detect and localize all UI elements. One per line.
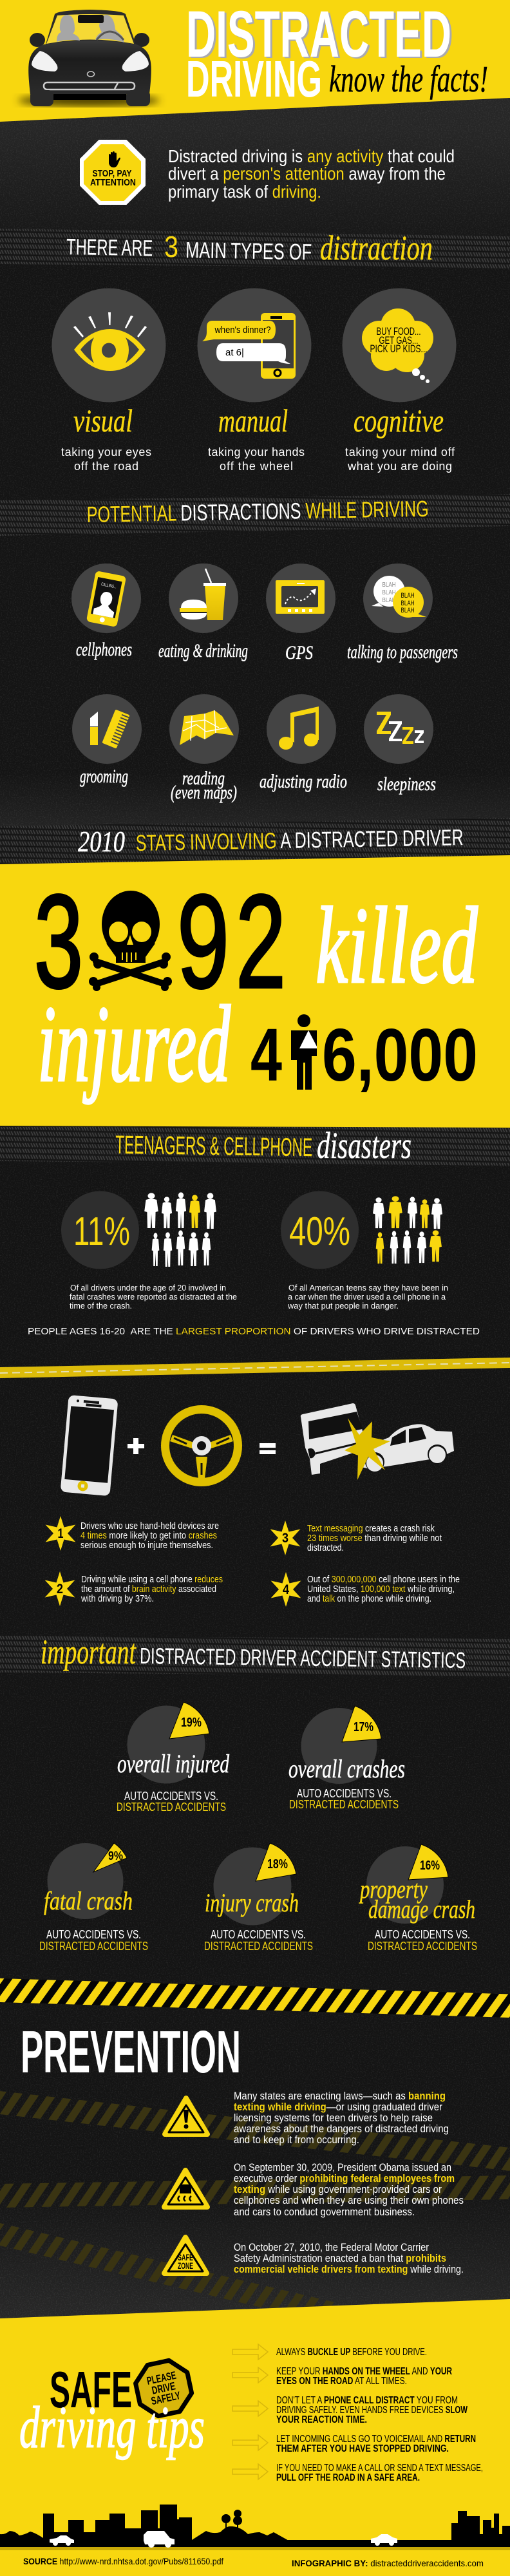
pie: overall crashes bbox=[288, 1706, 405, 1811]
caption: a car when the driver used a cell phone in a bbox=[288, 1293, 446, 1302]
heading: three main types: 3 bbox=[164, 230, 178, 263]
item: sleepiness bbox=[364, 694, 436, 795]
text bbox=[234, 2241, 464, 2275]
heading: important accident statistics: important bbox=[41, 1633, 137, 1671]
caption bbox=[287, 1283, 448, 1311]
facts list bbox=[45, 1516, 460, 1607]
stat: 11% bbox=[73, 1209, 130, 1254]
panel: visual bbox=[52, 289, 166, 473]
yellow background bbox=[0, 2299, 510, 2576]
tips list: DRIVING SAFELY. EVEN HANDS FREE DEVICES SLOW bbox=[276, 2405, 468, 2416]
pie: property damage crash bbox=[359, 1844, 477, 1953]
icon: people group bbox=[373, 1196, 442, 1264]
intro text: divert a person's attention away from the bbox=[168, 164, 446, 184]
pie: overall injured: overall injured bbox=[117, 1749, 230, 1778]
item: reading bbox=[169, 694, 239, 803]
pie: overall crashes: overall crashes bbox=[288, 1754, 405, 1783]
description: taking your mind off bbox=[345, 446, 455, 459]
fact 2 bbox=[45, 1571, 223, 1606]
item: sleepiness: sleepiness bbox=[377, 773, 436, 795]
tips list: DON'T LET A PHONE CALL DISTRACT YOU FROM bbox=[276, 2395, 458, 2406]
fact 4: Out of 300,000,000 cell phone users in the bbox=[307, 1575, 460, 1585]
panel: potential distractions grid bbox=[71, 564, 458, 803]
item: eating and drinking: eating & drinking bbox=[158, 640, 248, 661]
item: talking to passengers: BLAH bbox=[401, 592, 415, 600]
item: reading: reading bbox=[182, 768, 225, 789]
label: visual bbox=[73, 402, 133, 439]
icon: steering wheel bbox=[165, 1409, 238, 1482]
icon: thought cloud: PICK UP KIDS... bbox=[370, 343, 428, 355]
item: talking to passengers bbox=[347, 564, 458, 663]
fact 3 bbox=[270, 1520, 442, 1555]
circle bbox=[61, 1191, 139, 1269]
heading: 2010 stats bbox=[78, 825, 464, 858]
fact 4: and talk on the phone while driving. bbox=[307, 1594, 431, 1604]
circle bbox=[281, 1191, 359, 1269]
pie: property damage crash: AUTO ACCIDENTS VS. bbox=[375, 1928, 470, 1941]
pie: fatal crash: 9% bbox=[108, 1850, 123, 1863]
item: cellphones bbox=[71, 564, 141, 660]
fact 1: 1 bbox=[58, 1526, 64, 1541]
icon: people group bbox=[144, 1192, 216, 1267]
stat: 3092 killed: 2 bbox=[236, 867, 286, 1016]
stat: 416,000 injured: 4 bbox=[250, 1013, 282, 1097]
divider: yellow road line bbox=[0, 1358, 510, 1378]
icon: please drive safely sign: DRIVE bbox=[151, 2380, 176, 2397]
heading: safe: SAFE bbox=[50, 2361, 132, 2418]
icon: stop pay attention sign bbox=[80, 140, 145, 204]
pie: property damage crash: property bbox=[359, 1875, 428, 1904]
pie: injury crash: injury crash bbox=[205, 1888, 299, 1917]
caption: Of all American teens say they have been in bbox=[288, 1283, 448, 1293]
divider: hazard stripe tape bbox=[0, 1978, 510, 2018]
caption: time of the crash. bbox=[70, 1302, 132, 1311]
panel: cognitive bbox=[343, 289, 456, 473]
panel: safe driving tips bbox=[0, 2299, 510, 2576]
header panel bbox=[0, 0, 510, 122]
equals sign bbox=[260, 1443, 276, 1454]
pie: property damage crash: damage crash bbox=[368, 1895, 475, 1924]
panel: 2010 stats yellow bbox=[0, 855, 510, 1128]
tips list: ALWAYS BUCKLE UP BEFORE YOU DRIVE. bbox=[276, 2347, 427, 2358]
fact 2: with driving by 37%. bbox=[80, 1594, 154, 1604]
tips list: PULL OFF THE ROAD IN A SAFE AREA. bbox=[276, 2472, 420, 2483]
fact 3: 23 times worse than driving while not bbox=[307, 1533, 442, 1544]
item: grooming bbox=[72, 694, 142, 787]
intro text: Distracted driving is any activity that could bbox=[168, 146, 455, 166]
text bbox=[234, 2090, 449, 2146]
icon: phone bbox=[61, 1395, 118, 1496]
pie: overall crashes: AUTO ACCIDENTS VS. bbox=[297, 1787, 392, 1800]
description: off the road bbox=[74, 460, 138, 473]
text: and to keep it from occurring. bbox=[234, 2134, 359, 2146]
pie: property damage crash: DISTRACTED ACCIDENTS bbox=[368, 1940, 477, 1953]
prevention item 2 bbox=[164, 2161, 464, 2218]
icon: safe zone sign: SAFE bbox=[178, 2252, 193, 2262]
text: texting while driving—or using graduated driver bbox=[234, 2101, 442, 2113]
panel: manual bbox=[197, 289, 312, 473]
item: talking to passengers: BLAH bbox=[401, 607, 415, 614]
icon: please drive safely sign: SAFELY bbox=[150, 2389, 182, 2407]
icon: slippery road sign bbox=[164, 2170, 207, 2207]
icon: phone with text bubbles: at 6| bbox=[225, 347, 244, 358]
pie: injury crash: 18% bbox=[267, 1857, 288, 1871]
heading: prevention: PREVENTION bbox=[21, 2018, 241, 2085]
cars bbox=[50, 2531, 397, 2548]
tips list: EYES ON THE ROAD AT ALL TIMES. bbox=[276, 2376, 407, 2387]
description: taking your eyes bbox=[61, 446, 151, 459]
pie: fatal crash bbox=[39, 1843, 148, 1953]
fact 3: distracted. bbox=[307, 1543, 344, 1553]
fact 1 bbox=[46, 1516, 219, 1551]
text: licensing systems for teen drivers to help raise bbox=[234, 2112, 433, 2124]
stat: 40% bbox=[289, 1209, 350, 1254]
text: and cars to conduct government business. bbox=[234, 2206, 415, 2218]
item: gps bbox=[266, 564, 335, 663]
fact 3: 3 bbox=[282, 1531, 288, 1546]
pie: property damage crash: 16% bbox=[420, 1859, 440, 1873]
heading: potential distractions: POTENTIAL DISTRACTIONS WHILE DRIVING bbox=[86, 497, 429, 527]
item: talking to passengers: BLAH bbox=[382, 589, 395, 596]
fact 4 bbox=[271, 1572, 460, 1607]
circle bbox=[52, 289, 166, 402]
prevention item 1 bbox=[165, 2090, 449, 2146]
fact 1: serious enough to injure themselves. bbox=[80, 1540, 213, 1551]
icon: safe zone sign: ZONE bbox=[178, 2260, 193, 2271]
text: On September 30, 2009, President Obama issued an bbox=[234, 2161, 451, 2174]
intro text: primary task of driving. bbox=[168, 182, 321, 202]
text: texting while using government-provided cars or bbox=[234, 2183, 442, 2195]
fact 4: United States, 100,000 text while driving, bbox=[307, 1584, 455, 1595]
item: gps: GPS bbox=[285, 642, 313, 663]
icon: stop pay attention sign: ATTENTION bbox=[90, 177, 136, 188]
pie: overall injured: 19% bbox=[181, 1716, 202, 1730]
equation: phone plus wheel equals crash bbox=[61, 1395, 454, 1496]
fact 3: Text messaging creates a crash risk bbox=[307, 1524, 435, 1534]
icon: eye bbox=[73, 312, 147, 371]
pie: overall injured bbox=[117, 1702, 230, 1814]
icon: stop pay attention sign: STOP, PAY bbox=[93, 168, 131, 179]
tips list: YOUR REACTION TIME. bbox=[276, 2414, 367, 2425]
item: talking to passengers: BLAH bbox=[382, 582, 395, 589]
icon: phone with text bubbles: when's dinner? bbox=[214, 325, 270, 336]
panel: 11 percent bbox=[61, 1191, 237, 1311]
fact 2: the amount of brain activity associated bbox=[81, 1584, 216, 1595]
item: adjusting radio bbox=[260, 694, 347, 792]
circle bbox=[343, 289, 456, 402]
item: talking to passengers: talking to passengers bbox=[347, 641, 458, 663]
icon: truck and car crash bbox=[301, 1403, 454, 1480]
skyline bbox=[0, 2505, 510, 2550]
item: reading: (even maps) bbox=[171, 782, 237, 803]
stat: 3092 killed: 9 bbox=[177, 867, 229, 1016]
pie: fatal crash: AUTO ACCIDENTS VS. bbox=[46, 1928, 141, 1941]
callout: people ages 16-20: PEOPLE AGES 16-20 ARE THE LARGEST PROPORTION OF DRIVERS WHO DRIVE DISTRACTED bbox=[28, 1326, 480, 1337]
caption: Of all drivers under the age of 20 involved in bbox=[70, 1283, 226, 1293]
fact 1: 4 times more likely to get into crashes bbox=[80, 1531, 217, 1541]
heading: driving tips: driving tips bbox=[19, 2394, 205, 2460]
heading: three main types: MAIN TYPES OF bbox=[185, 238, 312, 265]
fact 2: 2 bbox=[57, 1582, 63, 1596]
icon: injured person (digit 1) bbox=[291, 1014, 317, 1090]
text: commercial vehicle drivers from texting while driving. bbox=[234, 2263, 464, 2275]
source: SOURCE http://www-nrd.nhtsa.dot.gov/Pubs/811650.pdf bbox=[23, 2556, 223, 2566]
panel: 40 percent bbox=[281, 1191, 448, 1311]
icon: skull and crossbones (digit 0) bbox=[89, 891, 172, 991]
caption: way that put people in danger. bbox=[287, 1302, 399, 1311]
title: driving: DRIVING bbox=[186, 50, 322, 108]
icon: thought cloud: GET GAS... bbox=[379, 334, 419, 346]
description bbox=[345, 446, 455, 473]
tips list: KEEP YOUR HANDS ON THE WHEEL AND YOUR bbox=[276, 2366, 452, 2377]
item: talking to passengers: BLAH bbox=[401, 600, 415, 607]
credit: INFOGRAPHIC BY: distracteddriveraccidents.com bbox=[292, 2558, 484, 2568]
heading: three main types: THERE ARE bbox=[66, 234, 153, 261]
text: On October 27, 2010, the Federal Motor Carrier bbox=[234, 2241, 429, 2253]
icon: car bbox=[18, 10, 160, 106]
stat: 3092 killed: 3 bbox=[34, 867, 83, 1016]
text: awareness about the dangers of distracted driving bbox=[234, 2123, 449, 2135]
description bbox=[61, 446, 151, 473]
icon: warning sign bbox=[165, 2098, 207, 2134]
icon: thought cloud bbox=[362, 308, 433, 383]
fact 2: Driving while using a cell phone reduces bbox=[81, 1575, 223, 1585]
pie: overall injured: AUTO ACCIDENTS VS. bbox=[124, 1790, 218, 1803]
intro text bbox=[168, 146, 455, 202]
description: taking your hands bbox=[208, 446, 305, 459]
heading: important accident statistics bbox=[41, 1633, 466, 1673]
pie: overall crashes: 17% bbox=[354, 1720, 373, 1734]
intro block bbox=[80, 140, 455, 204]
pie: injury crash bbox=[204, 1843, 313, 1953]
faint hazard stripes bbox=[0, 2091, 510, 2325]
stat: 3092 killed bbox=[34, 867, 478, 1016]
fact 4: 4 bbox=[283, 1582, 289, 1597]
label: cognitive bbox=[354, 402, 444, 439]
caption: fatal crashes were reported as distracted at the bbox=[70, 1293, 237, 1302]
heading: 2010 stats: 2010 bbox=[78, 825, 125, 858]
heading: teenagers and cellphone disasters bbox=[115, 1124, 411, 1166]
item: cellphones: CALLING... bbox=[100, 582, 117, 590]
stat: 416,000 injured: 6,000 bbox=[322, 1013, 478, 1097]
plus sign bbox=[128, 1438, 144, 1454]
tire track bands bbox=[0, 229, 510, 1676]
yellow header background bbox=[0, 0, 510, 122]
item: talking to passengers: BLAH bbox=[382, 597, 395, 604]
text: cellphones and when they are using their own phones bbox=[234, 2194, 464, 2206]
label: manual bbox=[218, 402, 288, 439]
icon: please drive safely sign bbox=[133, 2357, 195, 2420]
icon: phone with text bubbles bbox=[202, 313, 296, 379]
pie: fatal crash: fatal crash bbox=[44, 1886, 133, 1915]
description bbox=[208, 446, 305, 473]
pie: overall injured: DISTRACTED ACCIDENTS bbox=[117, 1801, 226, 1814]
tips list bbox=[276, 2347, 483, 2483]
icon: safe zone sign bbox=[164, 2237, 207, 2273]
item: adjusting radio: adjusting radio bbox=[260, 771, 347, 792]
item: eating and drinking bbox=[158, 564, 248, 661]
tips list: LET INCOMING CALLS GO TO VOICEMAIL AND RETURN bbox=[276, 2434, 476, 2445]
prevention item 3 bbox=[164, 2237, 464, 2275]
pie: injury crash: DISTRACTED ACCIDENTS bbox=[204, 1940, 313, 1953]
stat: 416,000 injured: injured bbox=[37, 983, 231, 1104]
text bbox=[234, 2161, 464, 2218]
caption bbox=[70, 1283, 237, 1311]
icon: please drive safely sign: PLEASE bbox=[146, 2369, 177, 2387]
text: Many states are enacting laws—such as banning bbox=[234, 2090, 446, 2102]
item: cellphones: cellphones bbox=[76, 639, 132, 660]
text: executive order prohibiting federal employees from bbox=[234, 2172, 455, 2184]
circle bbox=[197, 289, 312, 402]
text: Safety Administration enacted a ban that prohibits bbox=[234, 2252, 446, 2264]
pie: overall crashes: DISTRACTED ACCIDENTS bbox=[289, 1798, 399, 1811]
fact 1: Drivers who use hand-held devices are bbox=[80, 1521, 219, 1531]
tips list: THEM AFTER YOU HAVE STOPPED DRIVING. bbox=[276, 2443, 449, 2454]
description: what you are doing bbox=[347, 460, 452, 473]
icon: thought cloud: BUY FOOD... bbox=[376, 325, 421, 337]
heading: teenagers and cellphone disasters: disasters bbox=[317, 1124, 411, 1166]
pie: fatal crash: DISTRACTED ACCIDENTS bbox=[39, 1940, 148, 1953]
description: off the wheel bbox=[220, 460, 293, 473]
heading: teenagers and cellphone disasters: TEENAGERS & CELLPHONE bbox=[115, 1131, 312, 1162]
pie: injury crash: AUTO ACCIDENTS VS. bbox=[211, 1928, 306, 1941]
item: grooming: grooming bbox=[80, 766, 128, 787]
yellow background bbox=[0, 855, 510, 1128]
heading: three main types: distraction bbox=[320, 229, 433, 267]
arrows bbox=[232, 2344, 268, 2479]
heading: three main types bbox=[66, 229, 433, 267]
